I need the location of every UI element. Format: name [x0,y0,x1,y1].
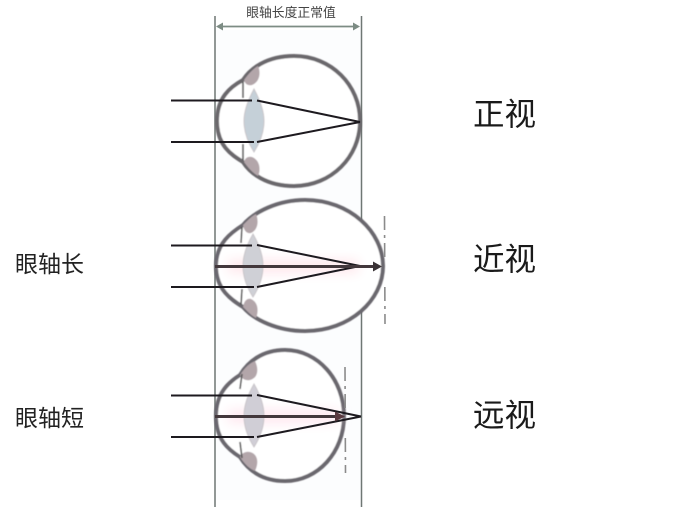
ciliary muscle top [243,214,258,233]
dashed retina plane: myopia [384,216,386,324]
left reference line [214,16,216,507]
right reference line [360,16,362,507]
tinted band between reference lines [216,30,361,500]
arrow: short axial length [215,412,345,422]
label: normal vision: 正视 [473,96,536,132]
ciliary muscle bottom [243,299,258,318]
arrow: long axial length [215,262,382,272]
lens [244,89,264,152]
ciliary muscle top [240,361,257,380]
iris [240,374,242,458]
eye: hyperopia [216,350,344,481]
label: myopia: 近视 [473,241,536,277]
label: short axial length: 眼轴短 [15,405,84,431]
ciliary muscle top [244,66,260,85]
arrow: normal axial length span [216,22,360,30]
ciliary muscle bottom [240,452,257,471]
label: long axial length: 眼轴长 [15,251,84,277]
eye: normal vision [217,56,360,186]
glow along optical axis [228,261,358,272]
lens [244,384,264,447]
title: normal axial length: 眼轴长度正常值 [246,5,336,20]
lens [243,234,263,297]
rays: hyperopia focus behind retina [171,395,361,437]
iris [242,82,244,160]
rays: myopia focus in front of retina [171,245,360,287]
ciliary muscle bottom [244,157,260,176]
label: hyperopia: 远视 [473,397,536,433]
glow along optical axis [228,411,338,422]
iris [241,227,242,305]
rays: normal vision focus on retina [171,100,360,142]
dashed retina plane: hyperopia [344,367,346,473]
eye: myopia [216,200,383,331]
